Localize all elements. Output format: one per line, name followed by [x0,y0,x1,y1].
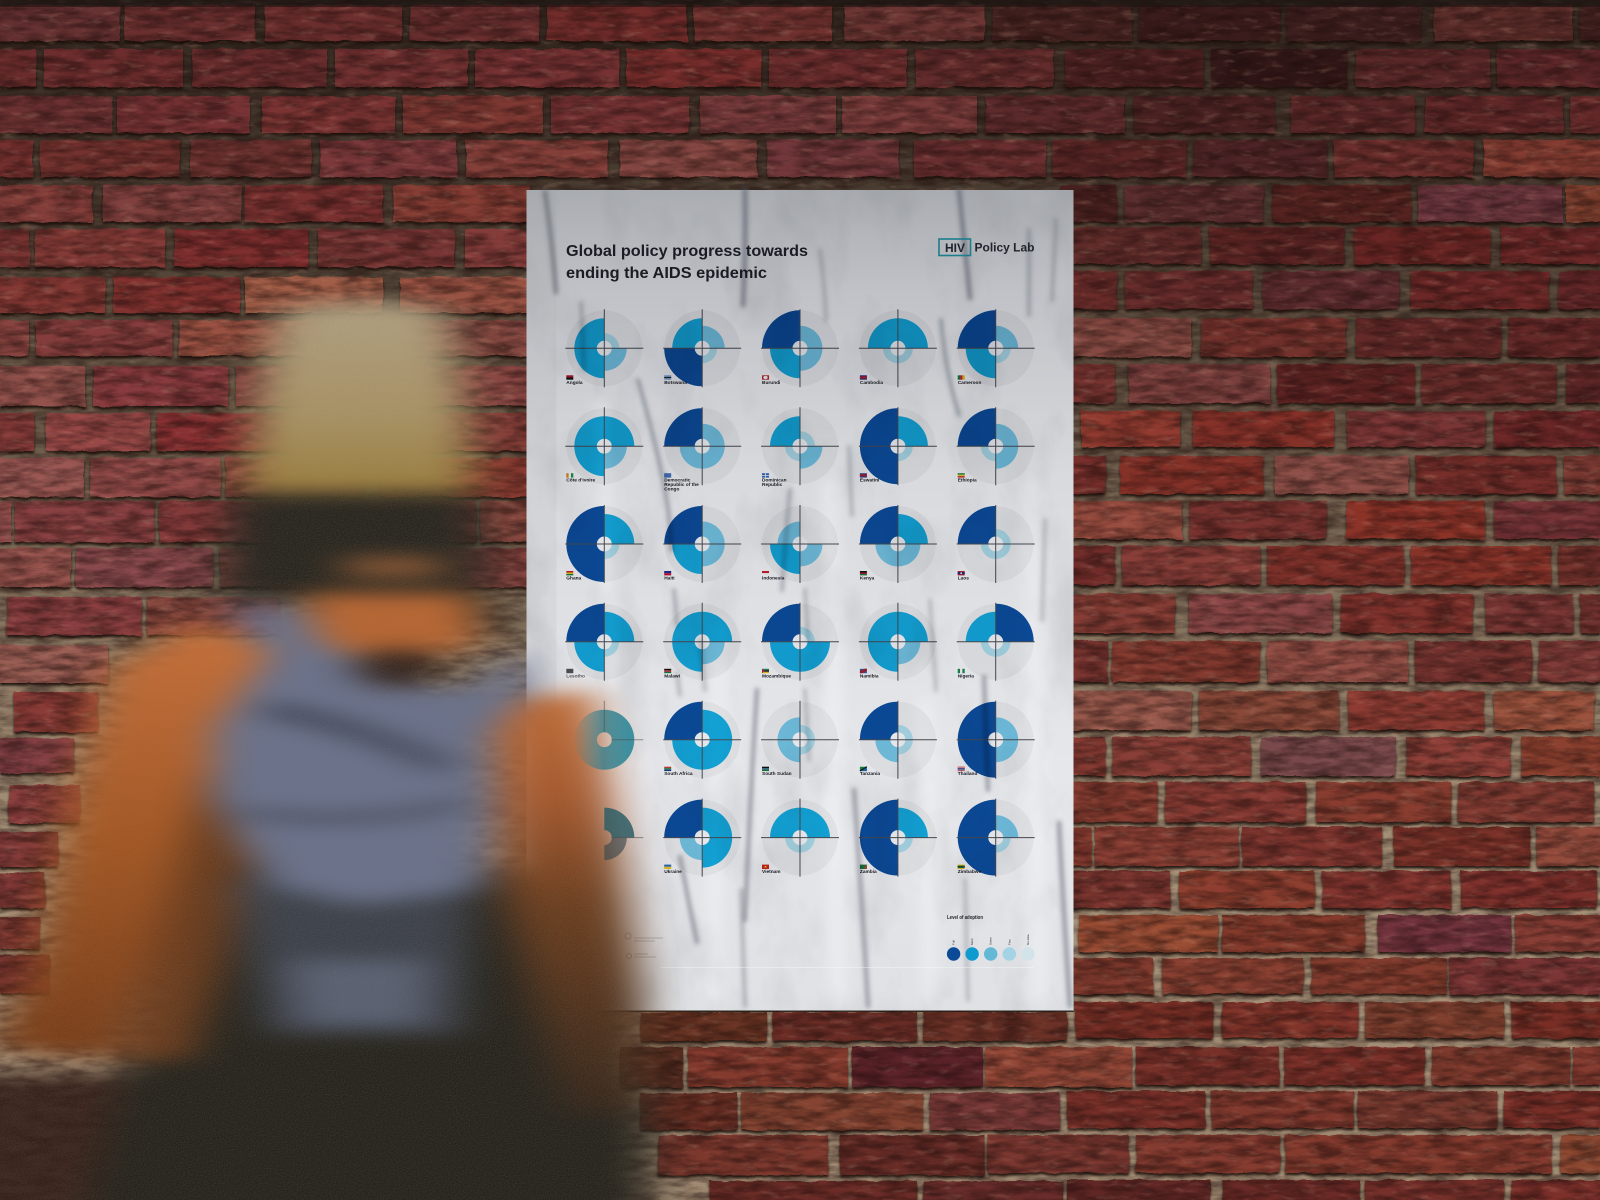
chart: Democratic Republic of the Congo [663,407,741,493]
chin shadow [356,648,440,688]
forehead band [345,557,442,577]
legend: level of adoption [947,915,1035,961]
chart: Zimbabwe: Zimbabwe [958,869,981,875]
chart: Angola: Angola [566,380,583,386]
legend: level of adoption: No data [1026,934,1030,945]
chart: Mozambique [761,603,839,681]
chart: obscured country, row six, seen through blur [604,808,643,860]
chart: Nigeria [957,603,1035,681]
chart: Nigeria: Nigeria [958,673,974,679]
chart: Vietnam [761,799,839,877]
blurred passer-by in foreground [0,302,652,1200]
chart: Côte d'Ivoire: Côte d'Ivoire [566,478,595,484]
shirt [212,606,530,905]
lower body and backpack [70,800,652,1200]
chart: Indonesia [761,505,839,583]
legend: level of adoption: Full [952,940,956,945]
footnote marks [625,933,663,959]
chart: Laos [957,505,1035,583]
chart: Haiti: Haiti [664,576,675,582]
chart: Haiti [663,505,741,583]
chart: obscured country, row five, seen through blur [574,701,643,770]
legend: level of adoption: Few [1007,938,1011,945]
face [305,593,478,655]
chart: Ukraine: Ukraine [664,869,682,875]
chart: Zimbabwe [957,799,1035,877]
chart: Eswatini [859,407,937,485]
chart: Kenya: Kenya [860,576,875,582]
brown shade between arm and body [120,770,250,1060]
chart: Dominican Republic [761,407,839,488]
chart: Angola [565,309,643,387]
chart: Namibia: Namibia [860,673,879,679]
chart: Mozambique: Mozambique [762,673,791,679]
chart: Kenya [859,505,937,583]
title: Global policy progress towards [566,243,808,260]
chart: Ethiopia: Ethiopia [958,478,977,484]
shirt folds [264,708,448,768]
chart: Ghana [565,505,643,583]
chart: Zambia [859,799,937,877]
logo: HIV Policy Lab [939,239,1034,256]
chart: Namibia [859,603,937,681]
chart: Laos: Laos [958,576,969,582]
left arm [0,622,272,1058]
chart: Zambia: Zambia [860,869,877,875]
chart: South Sudan: South Sudan [762,771,792,777]
chart: Cambodia: Cambodia [860,380,883,386]
chart: Botswana [663,309,741,387]
chart: Cameroon: Cameroon [958,380,981,386]
chart: Cambodia [859,309,937,387]
hat [245,302,472,492]
legend: level of adoption: Most [970,938,974,945]
bottom shade over wall [0,1075,270,1200]
logo: HIV Policy Lab: HIV [945,241,965,255]
chart: Ghana: Ghana [566,576,582,582]
chart: Democratic Republic of the Congo: Democratic [664,479,690,484]
title line 2: ending the AIDS epidemic [566,265,767,282]
chart: Ethiopia [957,407,1035,485]
chart: South Africa [663,701,741,779]
chart: Thailand: Thailand [958,771,977,777]
chart: Malawi [663,603,741,681]
chart: Tanzania [859,701,937,779]
lower shirt highlight [288,960,430,1025]
chart: Democratic Republic of the Congo: Congo [664,487,679,493]
chart: Indonesia: Indonesia [762,576,785,582]
logo: HIV Policy Lab: Policy Lab [974,242,1034,254]
chart: Cameroon [957,309,1035,387]
chart: Eswatini: Eswatini [860,478,879,484]
chart: Dominican Republic: Republic [762,482,783,488]
chart: Dominican Republic: Dominican [762,479,787,484]
chart: South Sudan [761,701,839,779]
chart: Ukraine [663,799,741,877]
chart: Lesotho [565,603,643,681]
chart: Vietnam: Vietnam [762,869,781,875]
chart: Burundi: Burundi [762,380,780,386]
legend: level of adoption: Level of adoption [947,915,983,921]
chart: Thailand [957,701,1035,779]
chart: Malawi: Malawi [664,673,680,679]
right arm [496,690,645,1120]
chart: Burundi [761,309,839,387]
chart: Botswana: Botswana [664,380,687,386]
chart: South Africa: South Africa [664,771,693,777]
chart: Tanzania: Tanzania [860,771,880,777]
footer rule [660,966,1034,968]
chart: Lesotho: Lesotho [566,673,585,679]
panel: poster [526,190,1074,1012]
legend: level of adoption: Some [989,937,993,945]
lower torso in grey [232,880,472,1035]
chart: Democratic Republic of the Congo: Republic of the [664,482,699,488]
chart: Côte d'Ivoire [565,407,643,485]
shirt fold lower [240,802,470,818]
brim shadow [225,494,510,640]
